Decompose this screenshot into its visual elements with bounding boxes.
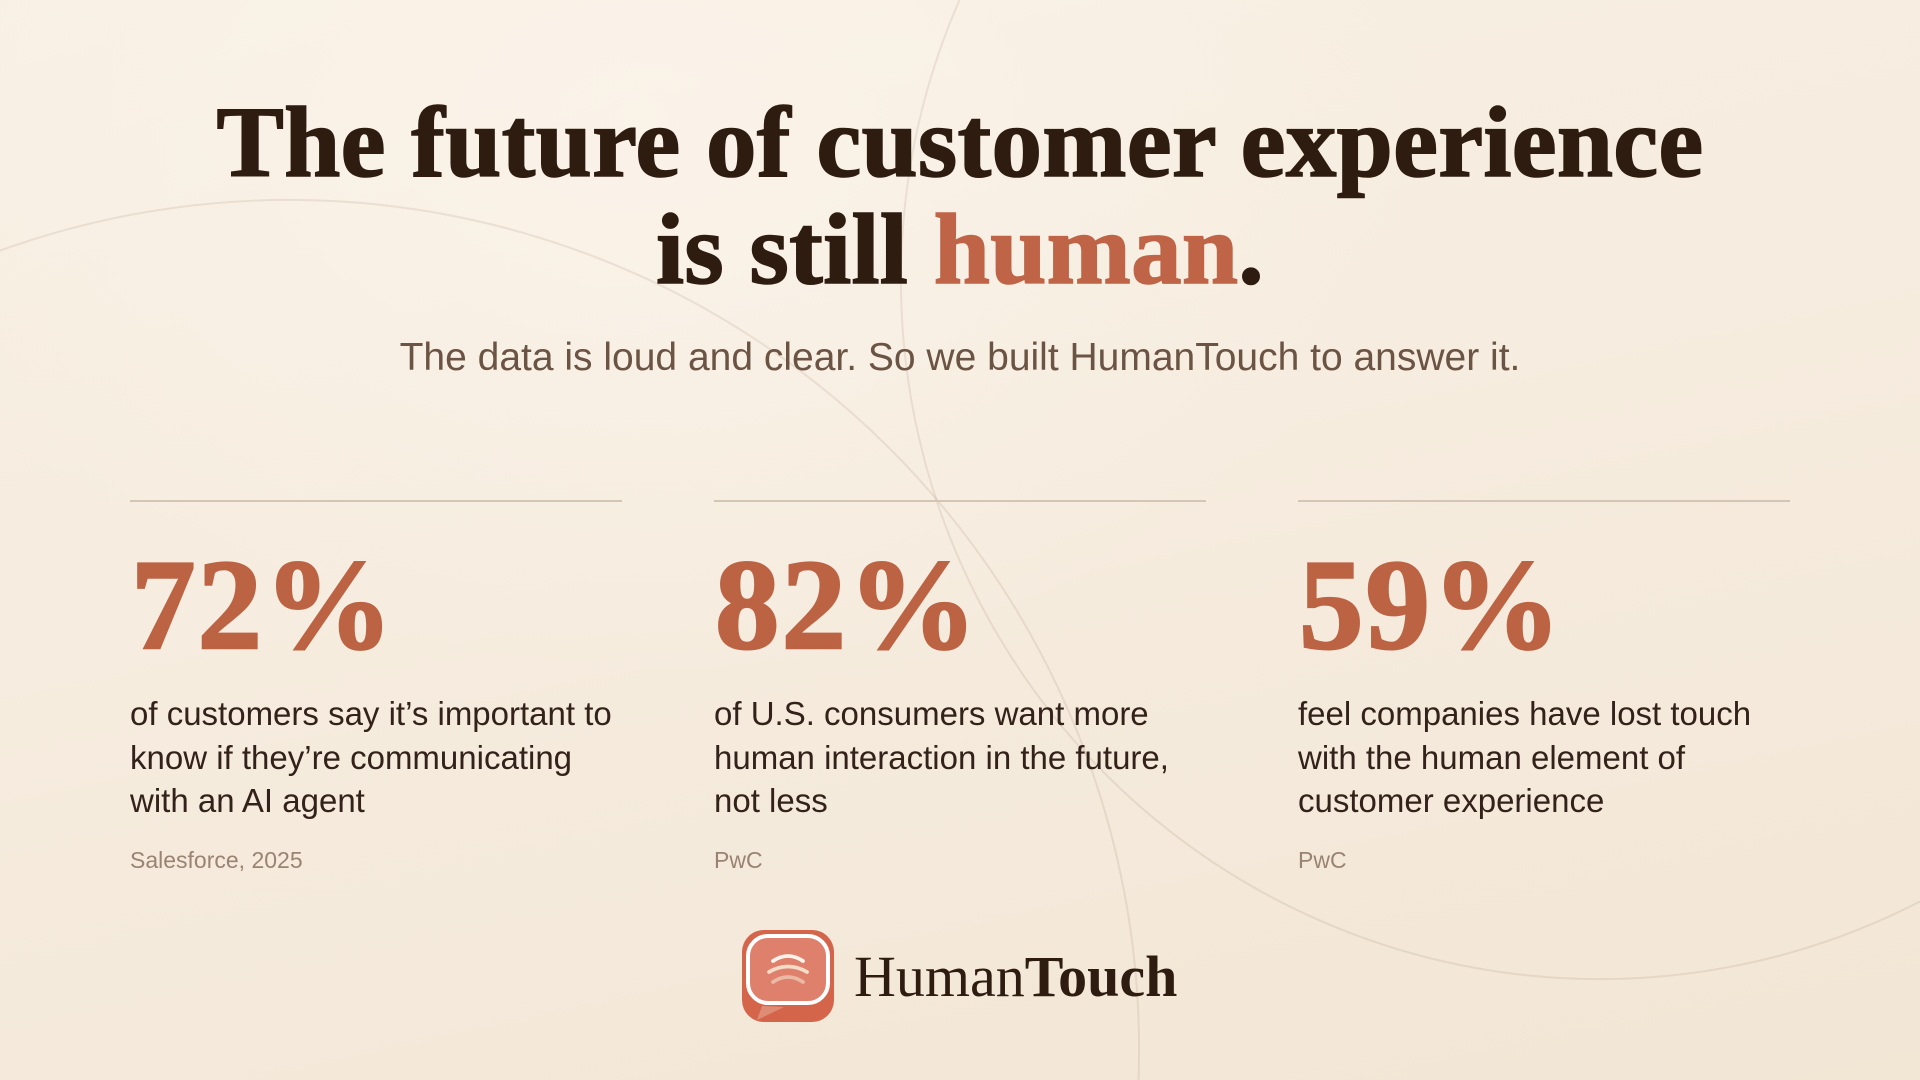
title (216, 86, 1704, 305)
stat number: 72% (131, 533, 395, 676)
source: PwC (714, 847, 763, 873)
icon: HumanTouch logo (742, 930, 834, 1022)
stat description: of customers say it’s important to (130, 695, 612, 732)
stat description: with the human element of (1298, 738, 1685, 776)
stat description (714, 695, 1169, 819)
source: PwC (1298, 847, 1347, 873)
stat description: customer experience (1298, 782, 1604, 819)
subtitle: The data is loud and clear. So we built HumanTouch to answer it. (400, 336, 1520, 379)
panel: stat 82% (714, 500, 1206, 873)
stat description: with an AI agent (130, 782, 365, 819)
stat number: 82% (715, 533, 979, 676)
source: Salesforce, 2025 (130, 847, 303, 873)
stat description: human interaction in the future, (714, 738, 1169, 776)
stat description: not less (714, 782, 828, 819)
stat description (1298, 695, 1751, 819)
panel: stat 72% (130, 500, 622, 873)
stat number: 59% (1299, 533, 1563, 676)
stat description (130, 695, 612, 819)
title: is still human. (656, 193, 1264, 305)
stat description: feel companies have lost touch (1298, 695, 1751, 732)
stat description: know if they’re communicating (130, 738, 572, 776)
title: The future of customer experience (216, 86, 1704, 198)
wordmark: HumanTouch (854, 944, 1177, 1009)
panel: stat 59% (1298, 500, 1790, 873)
stat description: of U.S. consumers want more (714, 695, 1149, 732)
